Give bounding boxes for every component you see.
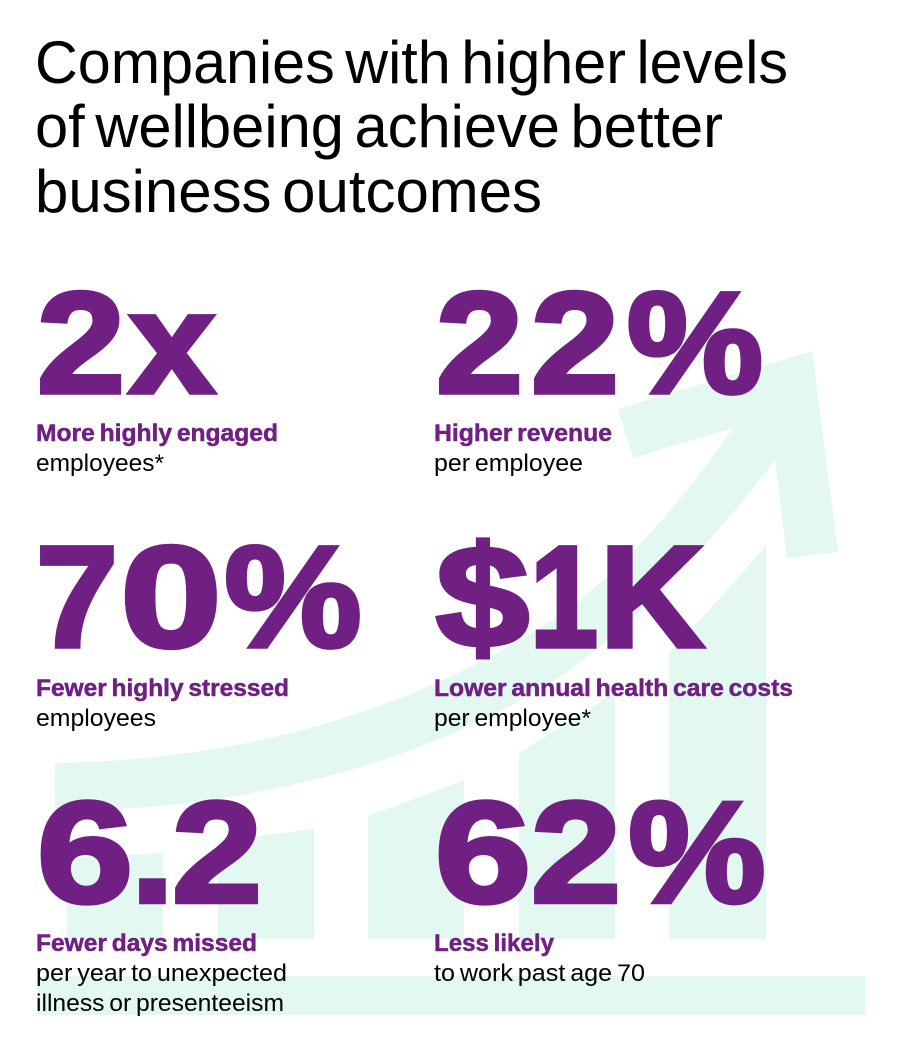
value: $1K: 1 (530, 516, 598, 678)
title: of wellbeing achieve better (35, 93, 723, 160)
bar 1 (67, 853, 163, 939)
stat: $1K lower health care costs: Lower annual health care costs (434, 675, 793, 702)
value: 6.2: 2 (172, 772, 262, 933)
stat: 22% higher revenue: per employee (434, 450, 583, 477)
stat: 2x more highly engaged (36, 262, 278, 477)
stat: $1K lower health care costs (434, 516, 793, 732)
value: 22% (436, 262, 763, 424)
value: 62%: 2 (531, 772, 621, 933)
value: 2x: 2 (37, 262, 125, 424)
value: 22%: 2 (436, 262, 523, 424)
arrow (55, 351, 838, 812)
value: 6.2 (37, 772, 262, 933)
stat: 2x more highly engaged: More highly engaged (36, 420, 278, 447)
stat: 6.2 fewer days missed: per year to unexpected (36, 960, 287, 987)
value: 6.2: . (131, 772, 174, 933)
title (35, 29, 788, 225)
value: 62%: 6 (435, 772, 531, 933)
stat: 62% less likely: Less likely (434, 930, 555, 957)
value: 70%: 7 (36, 516, 118, 678)
stat: 70% fewer highly stressed: employees (36, 705, 156, 732)
background: rising bar chart with arrow (37, 351, 865, 1015)
value: 2x (37, 262, 215, 424)
bar 4 (519, 692, 615, 939)
value: 22%: % (627, 262, 763, 424)
value: $1K: K (600, 516, 704, 678)
stat: 62% less likely (434, 772, 766, 987)
stat: $1K lower health care costs: per employee* (434, 705, 591, 732)
value: 70%: 0 (120, 516, 222, 678)
bar 3 (368, 780, 464, 939)
value: $1K: $ (436, 516, 529, 678)
value: 2x: x (129, 262, 215, 424)
value: 70%: % (224, 516, 362, 678)
bar 5 (669, 545, 766, 939)
value: 62%: % (628, 772, 766, 933)
stat: 70% fewer highly stressed (36, 516, 362, 732)
stat: 6.2 fewer days missed (36, 772, 287, 1017)
stat: 6.2 fewer days missed: Fewer days missed (36, 930, 257, 957)
stat: 22% higher revenue: Higher revenue (434, 420, 612, 447)
stat: 2x more highly engaged: employees* (36, 450, 164, 477)
baseline bar (37, 976, 865, 1015)
title: business outcomes (35, 158, 542, 225)
title: Companies with higher levels (35, 29, 788, 96)
stat: 70% fewer highly stressed: Fewer highly stressed (36, 675, 289, 702)
value: $1K (436, 516, 704, 678)
bar 2 (218, 829, 314, 939)
stat: 6.2 fewer days missed: illness or presenteeism (36, 990, 284, 1017)
value: 6.2: 6 (37, 772, 133, 933)
value: 62% (435, 772, 766, 933)
stat: 22% higher revenue (434, 262, 763, 477)
value: 70% (36, 516, 362, 678)
value: 22%: 2 (531, 262, 619, 424)
stat: 62% less likely: to work past age 70 (434, 960, 645, 987)
